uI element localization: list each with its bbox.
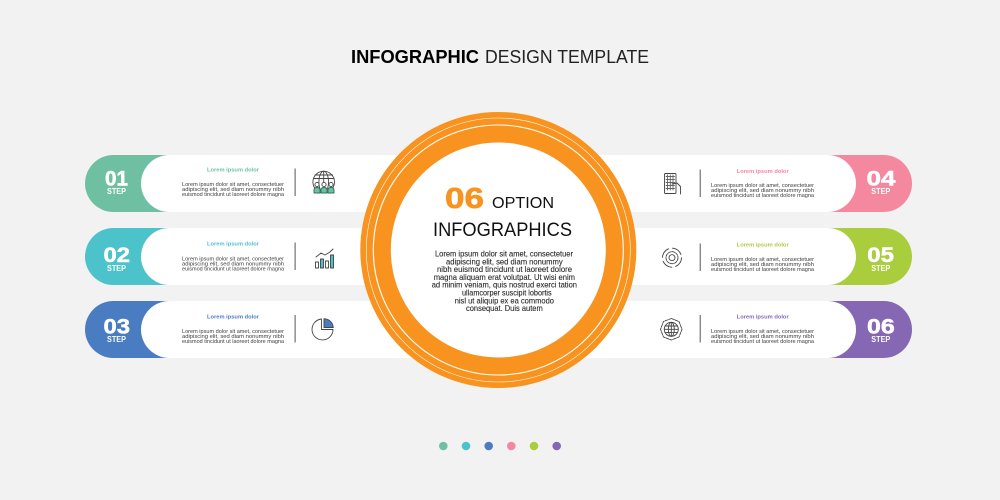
title	[351, 47, 649, 67]
text block: central description: Lorem ipsum dolor sit amet, consectetuer	[435, 250, 573, 259]
panel: step 06: 06	[867, 316, 895, 338]
heading: 06 option: OPTION	[492, 195, 554, 212]
panel: step 04: Lorem ipsum dolor	[737, 169, 790, 175]
text block: central description: ad minim veniam, quis nostrud exerci tation	[432, 281, 577, 290]
panel: step 01: Lorem ipsum dolor	[207, 168, 260, 174]
panel: step 01: 01	[105, 168, 128, 190]
panel: step 06: STEP	[871, 335, 891, 344]
title: DESIGN TEMPLATE	[485, 47, 649, 67]
icon: bar chart with trend line	[316, 249, 334, 268]
panel: step 03: Lorem ipsum dolor sit amet, consectetuer	[182, 329, 284, 335]
panel: step 04: STEP	[871, 187, 891, 196]
panel: step 02	[85, 228, 541, 285]
icon: network globe	[660, 318, 682, 340]
panel: step 01: Lorem ipsum dolor sit amet, consectetuer	[182, 182, 284, 188]
text block: central description	[432, 250, 577, 313]
title: INFOGRAPHIC	[351, 47, 479, 67]
panel: central circle	[360, 112, 636, 388]
icon: rotating gear	[662, 248, 682, 267]
panel: step 05: STEP	[871, 264, 891, 273]
text block: central description: adipiscing elit, sed diam nonummy	[446, 257, 564, 266]
panel: step 06: euismod tincidunt ut laoreet dolore magna	[711, 339, 814, 345]
panel: step 01: adipiscing elit, sed diam nonummy nibh	[182, 187, 284, 193]
panel: step 02: euismod tincidunt ut laoreet dolore magna	[182, 266, 284, 272]
panel: step 04: euismod tincidunt ut laoreet dolore magna	[711, 193, 814, 199]
heading: 06 option	[445, 183, 554, 215]
panel: step 05: Lorem ipsum dolor	[737, 243, 790, 249]
panel: step 06: Lorem ipsum dolor	[737, 315, 790, 321]
text block: central description: consequat. Duis autem	[466, 304, 543, 313]
panel: step 05: 05	[867, 244, 894, 267]
panel: step 04: adipiscing elit, sed diam nonummy nibh	[711, 188, 814, 194]
panel: step 01: euismod tincidunt ut laoreet dolore magna	[182, 192, 284, 198]
text block: central description: nisl ut aliquip ex ea commodo	[455, 296, 554, 305]
panel: step 05: adipiscing elit, sed diam nonummy nibh	[711, 262, 814, 268]
panel: step 03	[85, 301, 541, 358]
panel: step 02: 02	[104, 244, 130, 267]
panel: step 03: euismod tincidunt ut laoreet dolore magna	[182, 339, 284, 345]
panel: step 04: 04	[866, 168, 896, 190]
panel: step 01: STEP	[107, 187, 127, 196]
panel: step 04	[460, 155, 912, 212]
panel: step 06	[460, 301, 912, 358]
legend dots	[439, 442, 561, 450]
text block: central description: nibh euismod tincidunt ut laoreet dolore	[437, 265, 572, 274]
panel: step 01	[85, 155, 541, 212]
panel: step 04: Lorem ipsum dolor sit amet, consectetuer	[711, 183, 814, 189]
panel: step 03: adipiscing elit, sed diam nonummy nibh	[182, 334, 284, 340]
text block: central description: ullamcorper suscipit lobortis	[462, 288, 552, 297]
heading: 06 option: 06	[445, 183, 484, 215]
heading: infographics: INFOGRAPHICS	[433, 220, 572, 241]
panel: step 02: Lorem ipsum dolor	[207, 242, 260, 248]
panel: step 05: Lorem ipsum dolor sit amet, consectetuer	[711, 257, 814, 263]
panel: step 06: Lorem ipsum dolor sit amet, consectetuer	[711, 329, 814, 335]
text block: central description: magna aliquam erat volutpat. Ut wisi enim	[434, 273, 575, 282]
panel: step 02: Lorem ipsum dolor sit amet, consectetuer	[182, 256, 284, 262]
panel: step 06: adipiscing elit, sed diam nonummy nibh	[711, 334, 814, 340]
icon: pie chart	[312, 319, 333, 340]
panel: step 02: adipiscing elit, sed diam nonummy nibh	[182, 261, 284, 267]
panel: step 03: 03	[104, 316, 130, 338]
icon: globe with people	[313, 171, 335, 193]
panel: step 05	[460, 228, 912, 285]
panel: step 05: euismod tincidunt ut laoreet dolore magna	[711, 267, 814, 273]
panel: step 02: STEP	[107, 264, 127, 273]
panel: step 03: STEP	[107, 335, 127, 344]
panel: step 03: Lorem ipsum dolor	[207, 315, 260, 321]
icon: hand on calculator	[664, 174, 680, 194]
